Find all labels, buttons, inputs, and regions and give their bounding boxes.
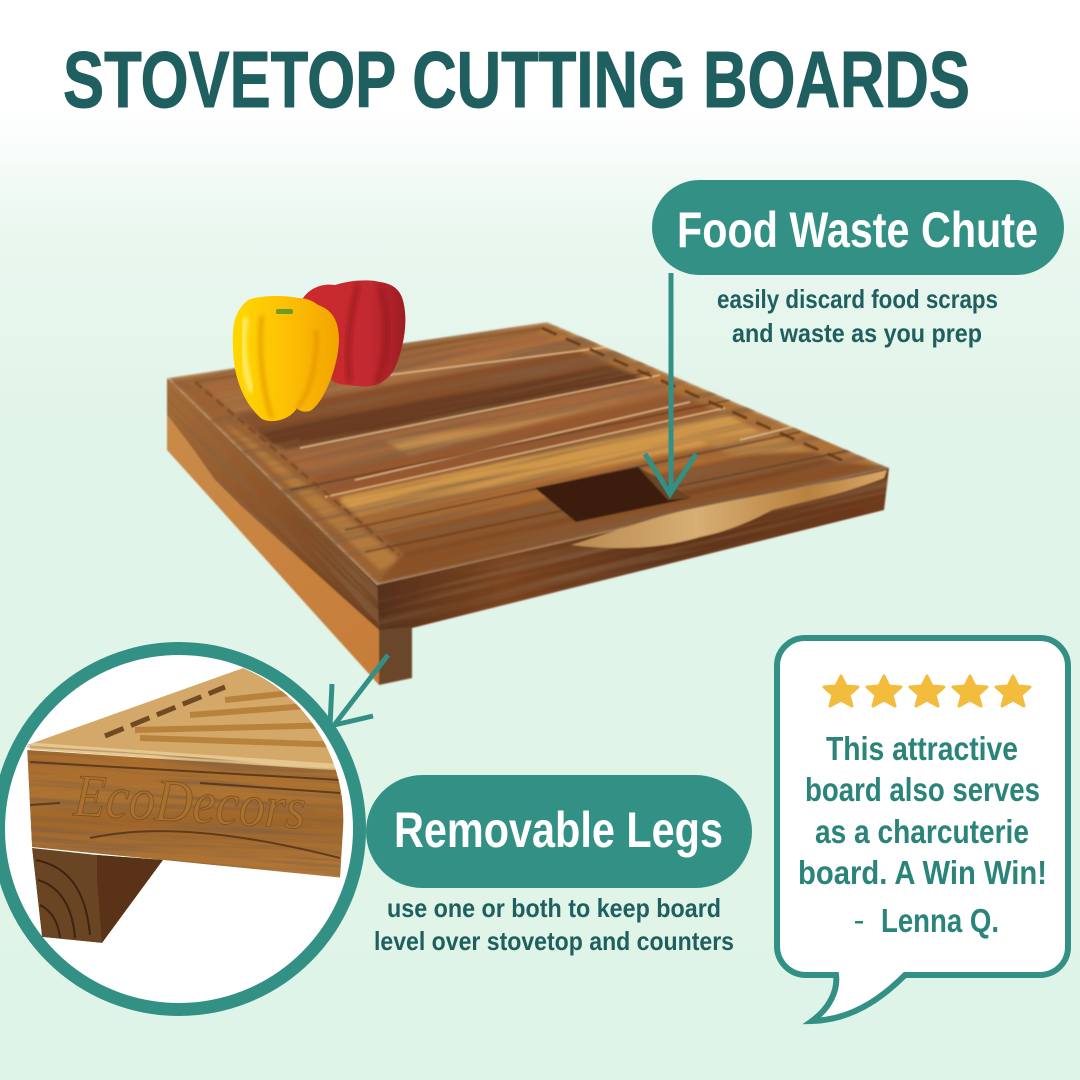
chute description	[717, 284, 998, 348]
legs description	[374, 893, 734, 956]
board top closeup	[27, 668, 360, 775]
review quote: This attractive	[826, 730, 1018, 767]
five star rating	[824, 676, 1030, 706]
yellow pepper	[233, 296, 339, 421]
leg closeup	[32, 848, 163, 943]
legs description: use one or both to keep board	[387, 893, 721, 923]
leg arrow	[330, 655, 388, 726]
chute description: easily discard food scraps	[717, 284, 998, 314]
chute description: and waste as you prep	[732, 318, 982, 348]
board left side	[166, 378, 380, 630]
cutting board photo	[166, 321, 890, 686]
yellow and red peppers	[233, 280, 405, 421]
legs description: level over stovetop and counters	[374, 926, 734, 956]
magnified leg circle	[0, 648, 375, 1010]
removable legs pill	[366, 775, 752, 888]
board top surface	[167, 321, 889, 586]
review quote: board also serves	[805, 771, 1040, 808]
engraved logo: EcoDecors	[71, 762, 308, 842]
removable legs pill: Removable Legs	[394, 802, 723, 858]
review quote	[798, 730, 1047, 939]
board face closeup	[27, 745, 344, 878]
review quote: board. A Win Win!	[798, 854, 1047, 891]
review speech bubble	[777, 638, 1068, 1021]
red pepper	[303, 280, 405, 386]
chute arrow	[645, 273, 696, 494]
food waste chute opening	[535, 467, 691, 522]
review quote: Lenna Q.	[881, 902, 999, 939]
review quote: as a charcuterie	[815, 813, 1029, 850]
board leg	[379, 627, 412, 685]
food waste chute pill	[652, 180, 1064, 275]
pepper stem	[276, 309, 293, 314]
board front edge	[332, 378, 937, 720]
juice groove	[195, 328, 846, 555]
board lower layer side	[167, 415, 379, 685]
handle crescent	[571, 470, 887, 548]
